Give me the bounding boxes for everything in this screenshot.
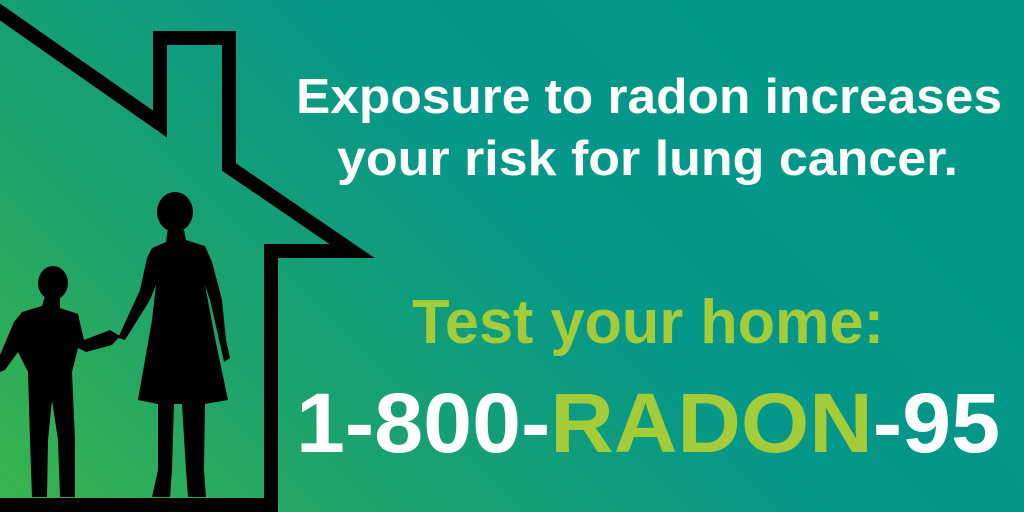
silhouette: boy xyxy=(0,266,120,497)
headline xyxy=(296,70,1002,186)
phone number: 1-800-RADON-95 xyxy=(296,376,1000,470)
call to action: Test your home: xyxy=(412,288,884,357)
headline: Exposure to radon increases xyxy=(296,70,1002,124)
headline: your risk for lung cancer. xyxy=(337,132,958,186)
silhouette: woman xyxy=(118,192,230,497)
house outline xyxy=(0,5,352,505)
